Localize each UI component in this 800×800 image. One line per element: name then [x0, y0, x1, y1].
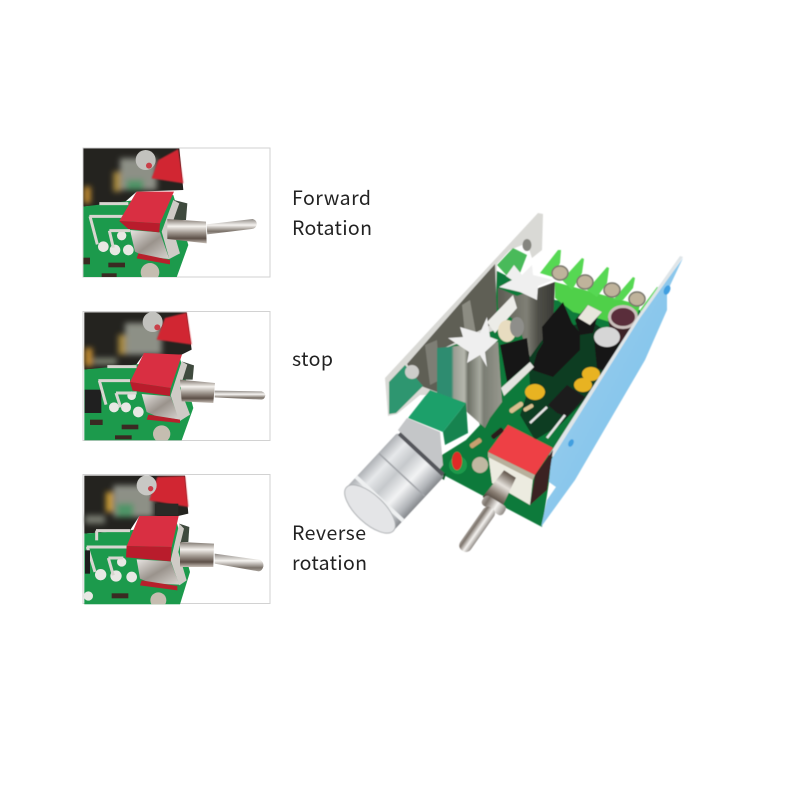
label: rotation: Rotation [292, 212, 372, 241]
fuse [575, 305, 602, 335]
label: forward rotation: Forward [292, 182, 371, 211]
terminal block [540, 250, 658, 322]
mica and mounting nut [487, 295, 524, 342]
pcb underside [438, 470, 446, 480]
yellow capacitors and ic [508, 367, 600, 438]
silkscreen band [501, 362, 534, 396]
panel: stop photo [83, 312, 270, 443]
panel: reverse rotation photo [83, 474, 270, 608]
label: rotation lower: rotation [292, 547, 367, 576]
label: stop: stop [292, 343, 333, 372]
right blue plate [541, 256, 683, 527]
rear heat sink [498, 282, 555, 357]
led and trimmer [449, 427, 504, 474]
pcb [438, 270, 650, 527]
switch photo: forward position [83, 148, 257, 282]
heat sink star tops [448, 265, 553, 367]
label: reverse: Reverse [292, 517, 366, 546]
black transistors [500, 302, 580, 382]
capacitors [594, 305, 639, 372]
panel: forward rotation photo [83, 148, 270, 282]
switch photo: reverse position [84, 475, 263, 608]
toggle switch [457, 425, 553, 554]
dark component area [520, 320, 625, 440]
knob [337, 431, 446, 541]
left aluminium plate [385, 213, 543, 416]
main product photo: motor speed controller [337, 213, 683, 554]
front heat sink [437, 342, 502, 428]
switch photo: centre position [84, 312, 265, 443]
knob collar [398, 418, 443, 473]
green potentiometer [408, 390, 468, 445]
